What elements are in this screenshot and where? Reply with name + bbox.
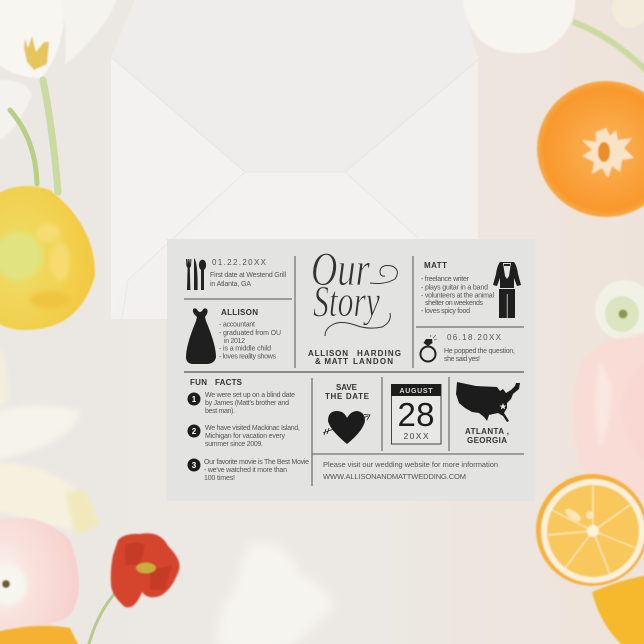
fact 2 [188, 424, 300, 448]
icon: dress [186, 308, 216, 364]
Matt profile: - freelance writer [421, 276, 470, 283]
flower: cream petals left [0, 345, 100, 535]
Allison profile: - is a middle child [219, 346, 271, 353]
Matt profile: - plays guitar in a band [421, 284, 488, 291]
couple names: & MATT [315, 357, 348, 366]
flower: pink peony right [573, 335, 644, 500]
Matt profile: shelter on weekends [425, 300, 484, 307]
Matt profile: MATT [424, 261, 447, 270]
Matt profile: - volunteers at the animal [421, 292, 494, 299]
title: Our Story [311, 243, 397, 336]
calendar: AUGUST [400, 388, 433, 395]
icon: USA map [456, 382, 520, 422]
card paper [167, 239, 535, 501]
couple names: LANDON [353, 357, 393, 366]
first date block: 01.22.20XX [212, 258, 267, 267]
save the date: SAVE [336, 383, 358, 392]
flower stems left [10, 80, 58, 192]
fact 2: 2 [192, 427, 197, 436]
save the date: THE DATE [325, 392, 370, 401]
fact 1: best man). [205, 408, 235, 415]
Allison profile: - accountant [219, 322, 255, 329]
fun facts heading: FACTS [215, 378, 243, 387]
first date block [210, 258, 286, 288]
fact 1: by James (Matt's brother and [205, 400, 289, 407]
Allison profile: - loves reality shows [219, 354, 276, 361]
Allison profile: - graduated from OU [219, 330, 281, 337]
envelope [111, 0, 478, 319]
title: Our Story: Our [311, 243, 370, 296]
icon: heart with arrow [323, 411, 370, 444]
fact 3: - we've watched it more than [204, 467, 287, 474]
fact 3: 3 [192, 461, 197, 470]
proposal block: He popped the question, [444, 348, 515, 355]
proposal block: she said yes! [444, 356, 480, 363]
proposal block [444, 333, 515, 363]
website note [323, 460, 498, 481]
couple names: HARDING [357, 349, 401, 358]
fact 2: summer since 2009. [205, 441, 263, 448]
fact 3 [188, 458, 309, 482]
flower: pale green bud [595, 280, 644, 340]
website note: Please visit our wedding website for more information [323, 460, 498, 469]
couple names [308, 349, 401, 366]
calendar: 20XX [404, 431, 429, 441]
location: GEORGIA [467, 436, 507, 445]
flower: yellow ranunculus [0, 186, 95, 330]
couple names: ALLISON [308, 349, 348, 358]
first date block: First date at Westend Grill [210, 272, 286, 279]
fact 2: Michigan for vacation every [205, 433, 286, 440]
invitation card [167, 239, 535, 501]
Matt profile [421, 261, 494, 315]
website note: WWW.ALLISONANDMATTWEDDING.COM [323, 472, 466, 481]
flower: white tulip top left [0, 0, 118, 142]
title: Our Story: Story [313, 278, 381, 326]
calendar: 28 [398, 396, 434, 433]
icon: fork, knife and spoon [186, 258, 206, 290]
fact 3: Our favorite movie is The Best Movie [204, 459, 309, 466]
Allison profile: in 2012 [224, 338, 245, 345]
fun facts heading: FUN [190, 378, 207, 387]
first date block: in Atlanta, GA [210, 281, 251, 288]
flower: white tulip bottom [218, 543, 332, 644]
flower: orange bottom left [0, 626, 80, 644]
Allison profile: ALLISON [221, 308, 258, 317]
icon: tuxedo [493, 262, 521, 318]
Allison profile [219, 308, 281, 361]
flower: pink ranunculus bottom left [0, 518, 79, 629]
icon: diamond ring [420, 335, 437, 362]
orange slice [537, 81, 644, 217]
location: ATLANTA , [465, 427, 509, 436]
save the date [325, 383, 370, 401]
fact 1 [188, 392, 295, 415]
fun facts heading [190, 378, 243, 387]
location [465, 427, 509, 445]
Matt profile: - loves spicy food [421, 308, 470, 315]
fact 3: 100 times! [204, 475, 235, 482]
flower: yellow bottom right [592, 575, 644, 644]
proposal block: 06.18.20XX [447, 333, 502, 342]
flower: white tulip top right [462, 0, 644, 72]
fact 1: We were set up on a blind date [205, 392, 295, 399]
calendar [391, 384, 441, 444]
divider lines [184, 256, 524, 486]
fact 1: 1 [192, 395, 197, 404]
flower: red poppy with stem [88, 533, 180, 644]
fact 2: We have visited Mackinac Island, [205, 425, 300, 432]
lemon slice [536, 474, 644, 586]
